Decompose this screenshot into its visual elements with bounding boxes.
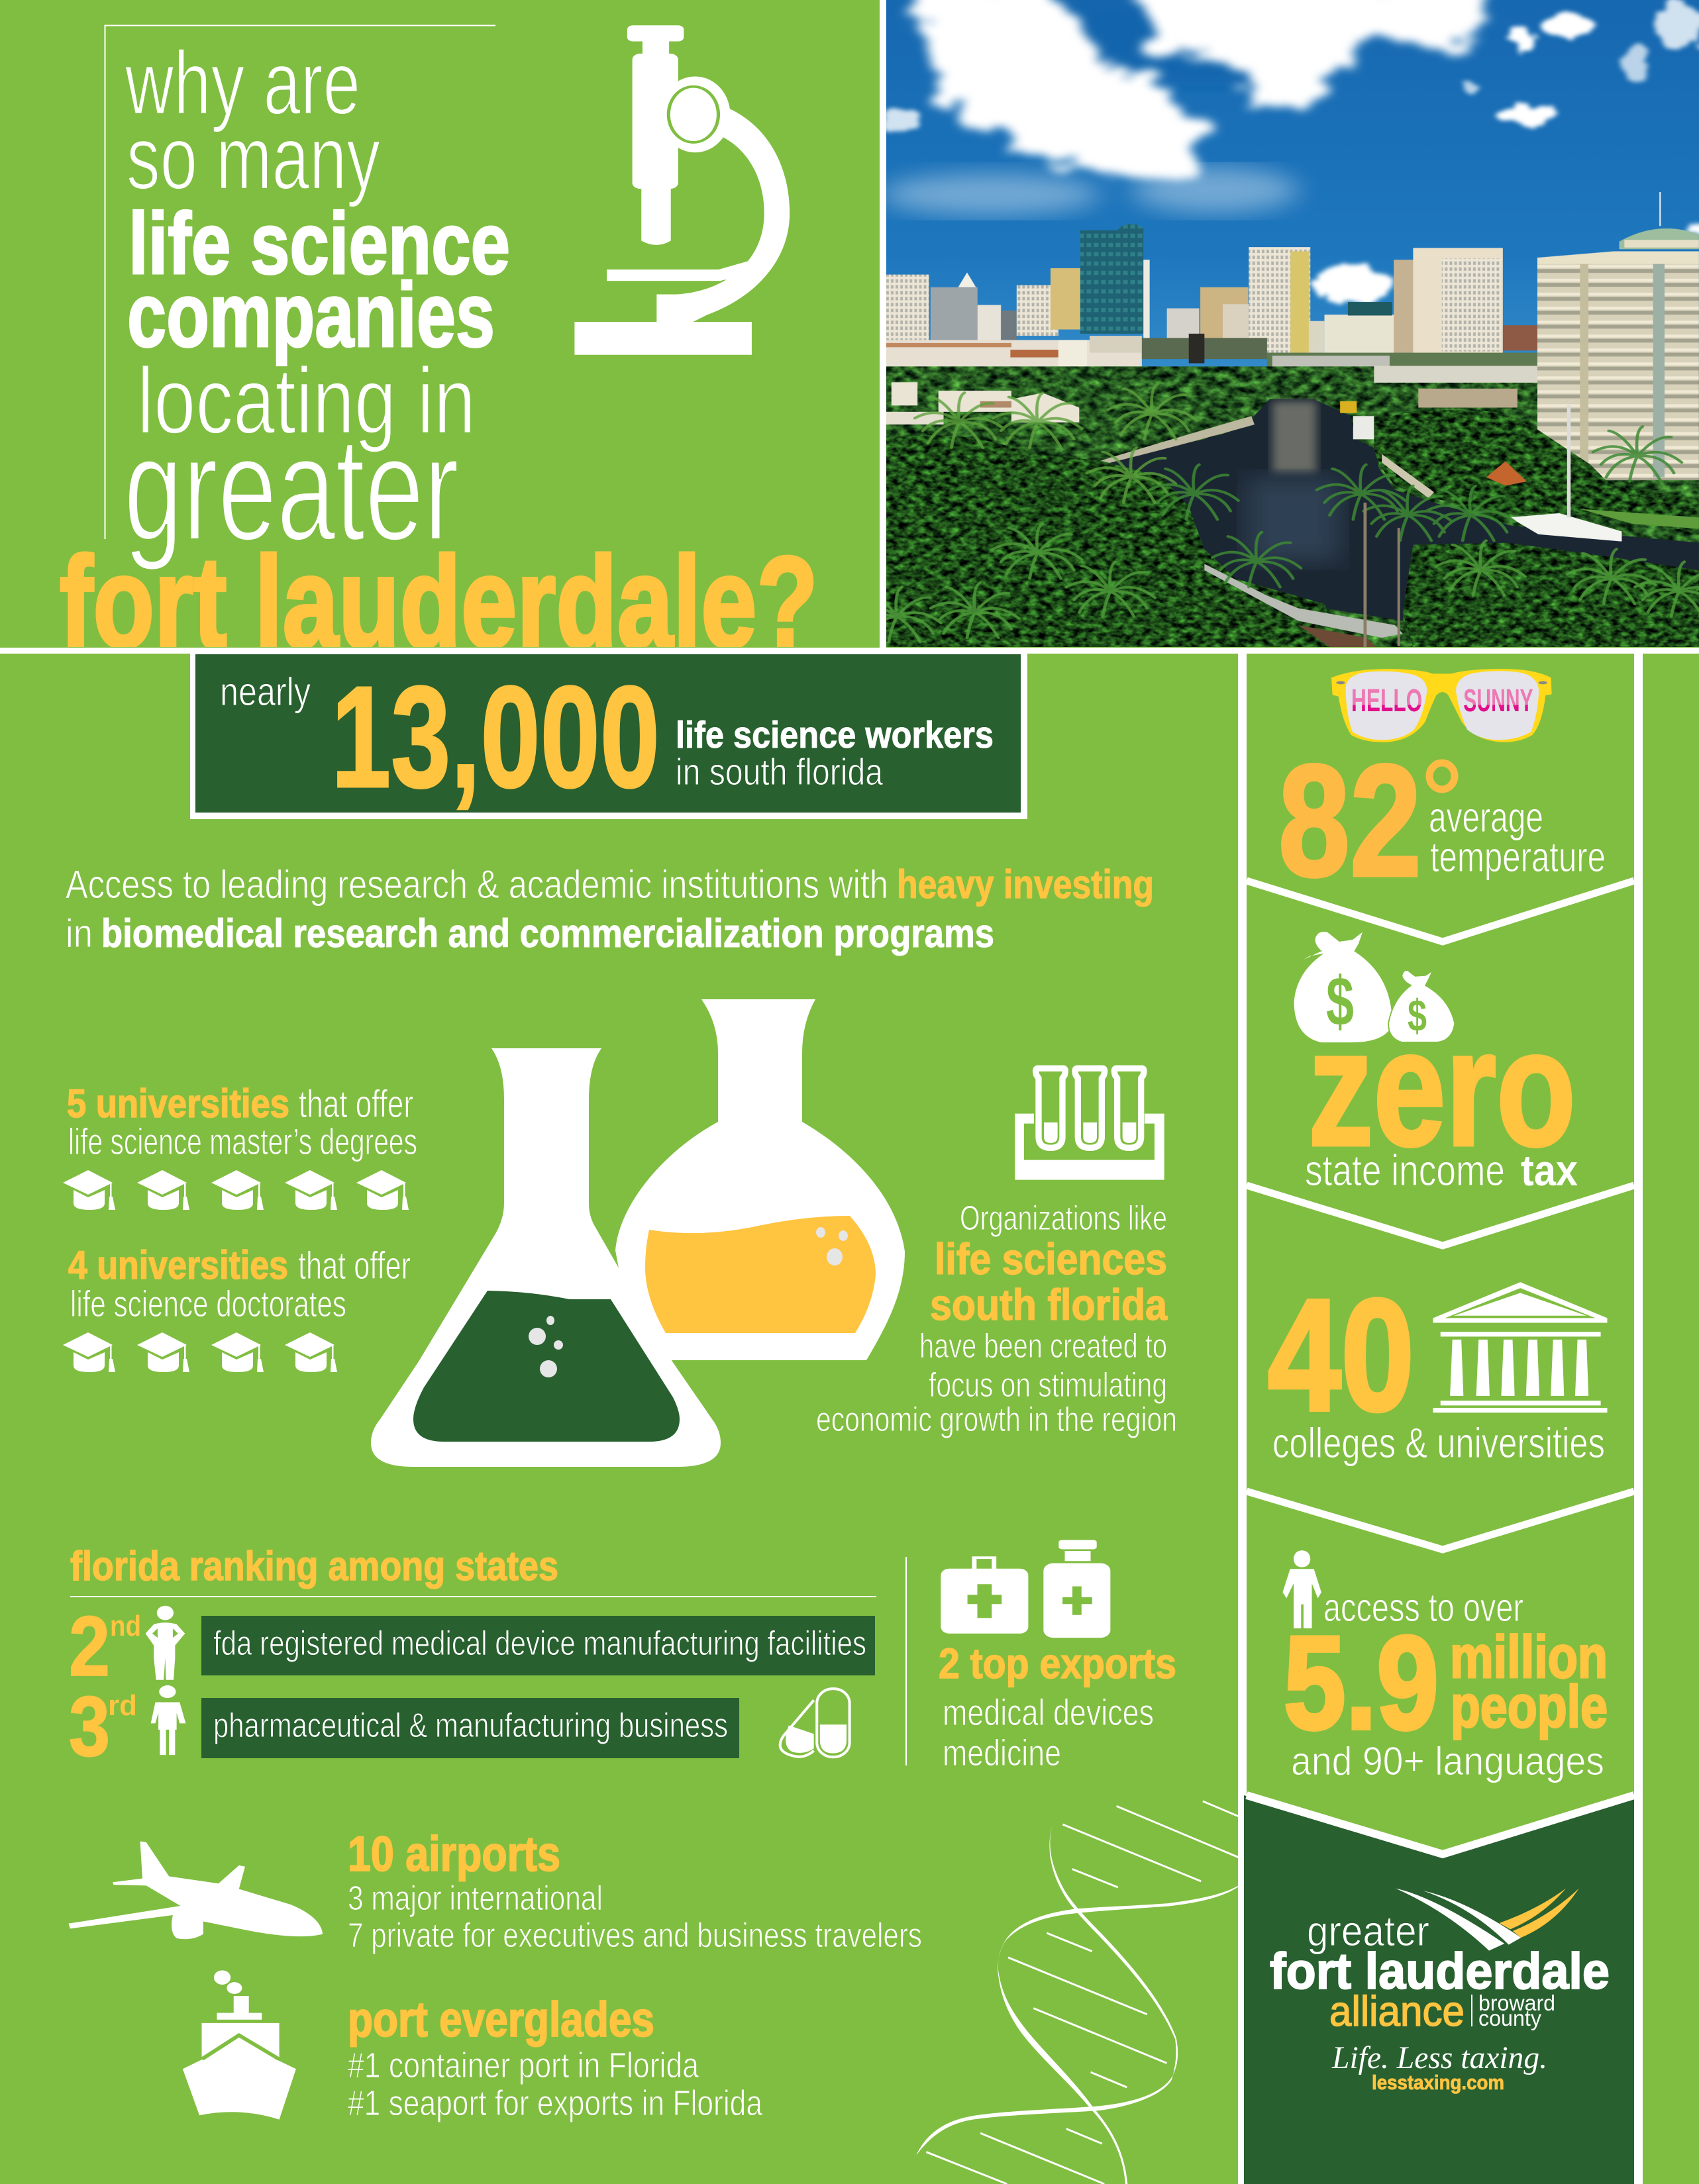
stat: 82 degrees: 82 (1278, 732, 1421, 909)
title: why are: why are (125, 32, 360, 133)
text block: organizations like life sciences south florida: Organizations like (960, 1199, 1167, 1238)
glasses text: sunny: SUNNY (1463, 683, 1533, 719)
box: fda registered (201, 1616, 875, 1675)
text block: 10 airports: 3 major international (348, 1879, 603, 1918)
text block: 10 airports: 7 private for executives and business travelers (348, 1916, 922, 1955)
stat: 5.9 million people: people (1451, 1674, 1608, 1740)
logo: greater fort lauderdale alliance: lesstaxing.com (1372, 2071, 1504, 2094)
icon: university temple (1433, 1282, 1607, 1413)
stat: 82 degrees (1278, 732, 1606, 909)
stat: 82 degrees: temperature (1430, 833, 1606, 881)
stat: 82 degrees: average (1429, 793, 1543, 841)
photo: Fort Lauderdale skyline and river (852, 0, 1699, 648)
in south florida: in south florida (676, 751, 883, 793)
title: locating in: locating in (137, 348, 476, 454)
icon: money bags (1294, 932, 1455, 1042)
stat: zero state income tax: tax (1521, 1146, 1578, 1195)
stat: 5.9 million people (1284, 1585, 1608, 1783)
rank: 2nd (69, 1599, 141, 1694)
text block: organizations like life sciences south florida: economic growth in the region (816, 1401, 1177, 1439)
icons: four graduation caps (63, 1332, 337, 1372)
stat: 40 colleges and universities (1268, 1266, 1605, 1467)
icon: hello sunny sunglasses (1331, 669, 1552, 742)
text block: port everglades (348, 1992, 763, 2123)
title: greater: greater (124, 406, 459, 571)
river (1100, 399, 1699, 621)
banner: nearly 13,000 life science workers (190, 649, 1027, 819)
icon: test tubes (1015, 1068, 1164, 1180)
title block (60, 25, 818, 675)
icon: medical kit (941, 1558, 1028, 1634)
text block: port everglades: port everglades (348, 1992, 654, 2047)
nearly: nearly (220, 670, 311, 714)
text block: organizations like life sciences south florida: focus on stimulating (929, 1366, 1167, 1405)
title: life science: life science (129, 195, 510, 292)
text block: port everglades: #1 container port in Florida (348, 2046, 699, 2085)
text block: port everglades: #1 seaport for exports in Florida (348, 2083, 763, 2123)
text block: 4 universities: 4 universities (68, 1243, 288, 1287)
icon: person (1282, 1550, 1321, 1628)
stat: 5.9 million people: 5.9 (1284, 1609, 1439, 1757)
sidebar chevrons (1247, 881, 1634, 1854)
stat: 40 colleges and universities: 40 (1268, 1266, 1414, 1444)
box: pharmaceutical (201, 1698, 739, 1758)
logo: greater fort lauderdale alliance: fort lauderdale (1270, 1943, 1610, 2000)
logo: greater fort lauderdale alliance: greater (1307, 1907, 1429, 1955)
logo: greater fort lauderdale alliance: Life. Less taxing. (1331, 2040, 1547, 2075)
text block: 5 universities: life science master’s degrees (68, 1120, 417, 1162)
text block: 5 universities: that offer (299, 1083, 413, 1126)
icon: microscope (574, 25, 790, 355)
logo: greater fort lauderdale alliance: alliance (1329, 1987, 1465, 2035)
stat: 5.9 million people: million (1450, 1624, 1608, 1691)
text block: 4 universities: life science doctorates (70, 1283, 346, 1324)
heading: florida ranking among states: florida ranking among states (70, 1544, 558, 1589)
title: so many: so many (127, 107, 380, 208)
icon: money bags: $ (1408, 991, 1427, 1041)
stat: 40 colleges and universities: colleges & universities (1272, 1419, 1605, 1467)
text block: access to leading research: heavy investing (897, 862, 1154, 907)
text block: access to leading research: Access to leading research & academic institutions with (66, 862, 888, 907)
box: pharmaceutical: pharmaceutical & manufacturing business (213, 1707, 728, 1745)
icon: ship (183, 1970, 296, 2120)
text block: access to leading research: biomedical research and commercialization programs (101, 911, 994, 956)
text block: organizations like life sciences south florida (816, 1199, 1177, 1439)
icon: airplane (69, 1842, 323, 1939)
rank: 2nd: nd (110, 1610, 141, 1642)
rank: 3rd: rd (108, 1689, 137, 1722)
icon: person with hands on hips (146, 1606, 185, 1680)
logo: greater fort lauderdale alliance: county (1478, 2006, 1541, 2030)
life science workers: life science workers (676, 714, 994, 756)
icon: pill capsules (780, 1689, 850, 1757)
13,000: 13,000 (331, 657, 660, 818)
rank: 2nd: 2 (69, 1599, 110, 1694)
stat: zero state income tax: zero (1308, 995, 1576, 1180)
panel: logo background (1244, 1795, 1634, 2184)
ranking rule (70, 1596, 876, 1597)
rank: 3rd (69, 1679, 137, 1774)
sidebar column rules (1238, 654, 1643, 2184)
text block: 5 universities (67, 1081, 417, 1162)
logo: greater fort lauderdale alliance (1270, 1889, 1610, 2094)
text block: organizations like life sciences south florida: south florida (930, 1280, 1168, 1329)
text block: 10 airports: 10 airports (348, 1826, 560, 1881)
text block: 10 airports (348, 1826, 922, 1955)
stat: 5.9 million people: access to over (1323, 1585, 1523, 1630)
text block: access to leading research: in (66, 911, 93, 956)
box: fda registered: fda registered medical device manufacturing facilities (213, 1624, 866, 1663)
text block: 4 universities: that offer (298, 1244, 411, 1287)
text block: 2 top exports: medicine (943, 1732, 1061, 1773)
text block: access to leading research (66, 862, 1154, 956)
text block: 2 top exports: 2 top exports (939, 1640, 1176, 1687)
rank: 3rd: 3 (69, 1679, 110, 1774)
text block: 2 top exports (939, 1640, 1176, 1773)
logo: greater fort lauderdale alliance: broward (1478, 1991, 1555, 2015)
text block: organizations like life sciences south florida: have been created to (919, 1327, 1167, 1365)
icon: round flask with yellow liquid (615, 999, 905, 1360)
text block: 5 universities: 5 universities (67, 1081, 289, 1126)
icon: conical flask with dark green liquid (371, 1048, 721, 1467)
text block: organizations like life sciences south florida: life sciences (935, 1234, 1167, 1283)
glasses text: hello: HELLO (1351, 683, 1422, 719)
text block: 4 universities (68, 1243, 411, 1324)
stat: zero state income tax: state income (1305, 1146, 1505, 1195)
icon: medicine bottle (1043, 1540, 1110, 1638)
title: companies: companies (127, 264, 495, 366)
icons: five graduation caps (63, 1170, 409, 1210)
stat: 5.9 million people: and 90+ languages (1291, 1739, 1604, 1783)
title: fort lauderdale?: fort lauderdale? (60, 530, 818, 675)
logo swoosh (1396, 1889, 1579, 1951)
icon: money bags: $ (1326, 963, 1354, 1040)
illustration: dna helix (916, 1801, 1239, 2184)
divider: ranking and exports (905, 1557, 907, 1765)
title corner rule (105, 25, 495, 539)
icon: standing person (151, 1685, 185, 1755)
frame: white rules around header (0, 0, 1699, 654)
text block: 2 top exports: medical devices (943, 1691, 1154, 1733)
